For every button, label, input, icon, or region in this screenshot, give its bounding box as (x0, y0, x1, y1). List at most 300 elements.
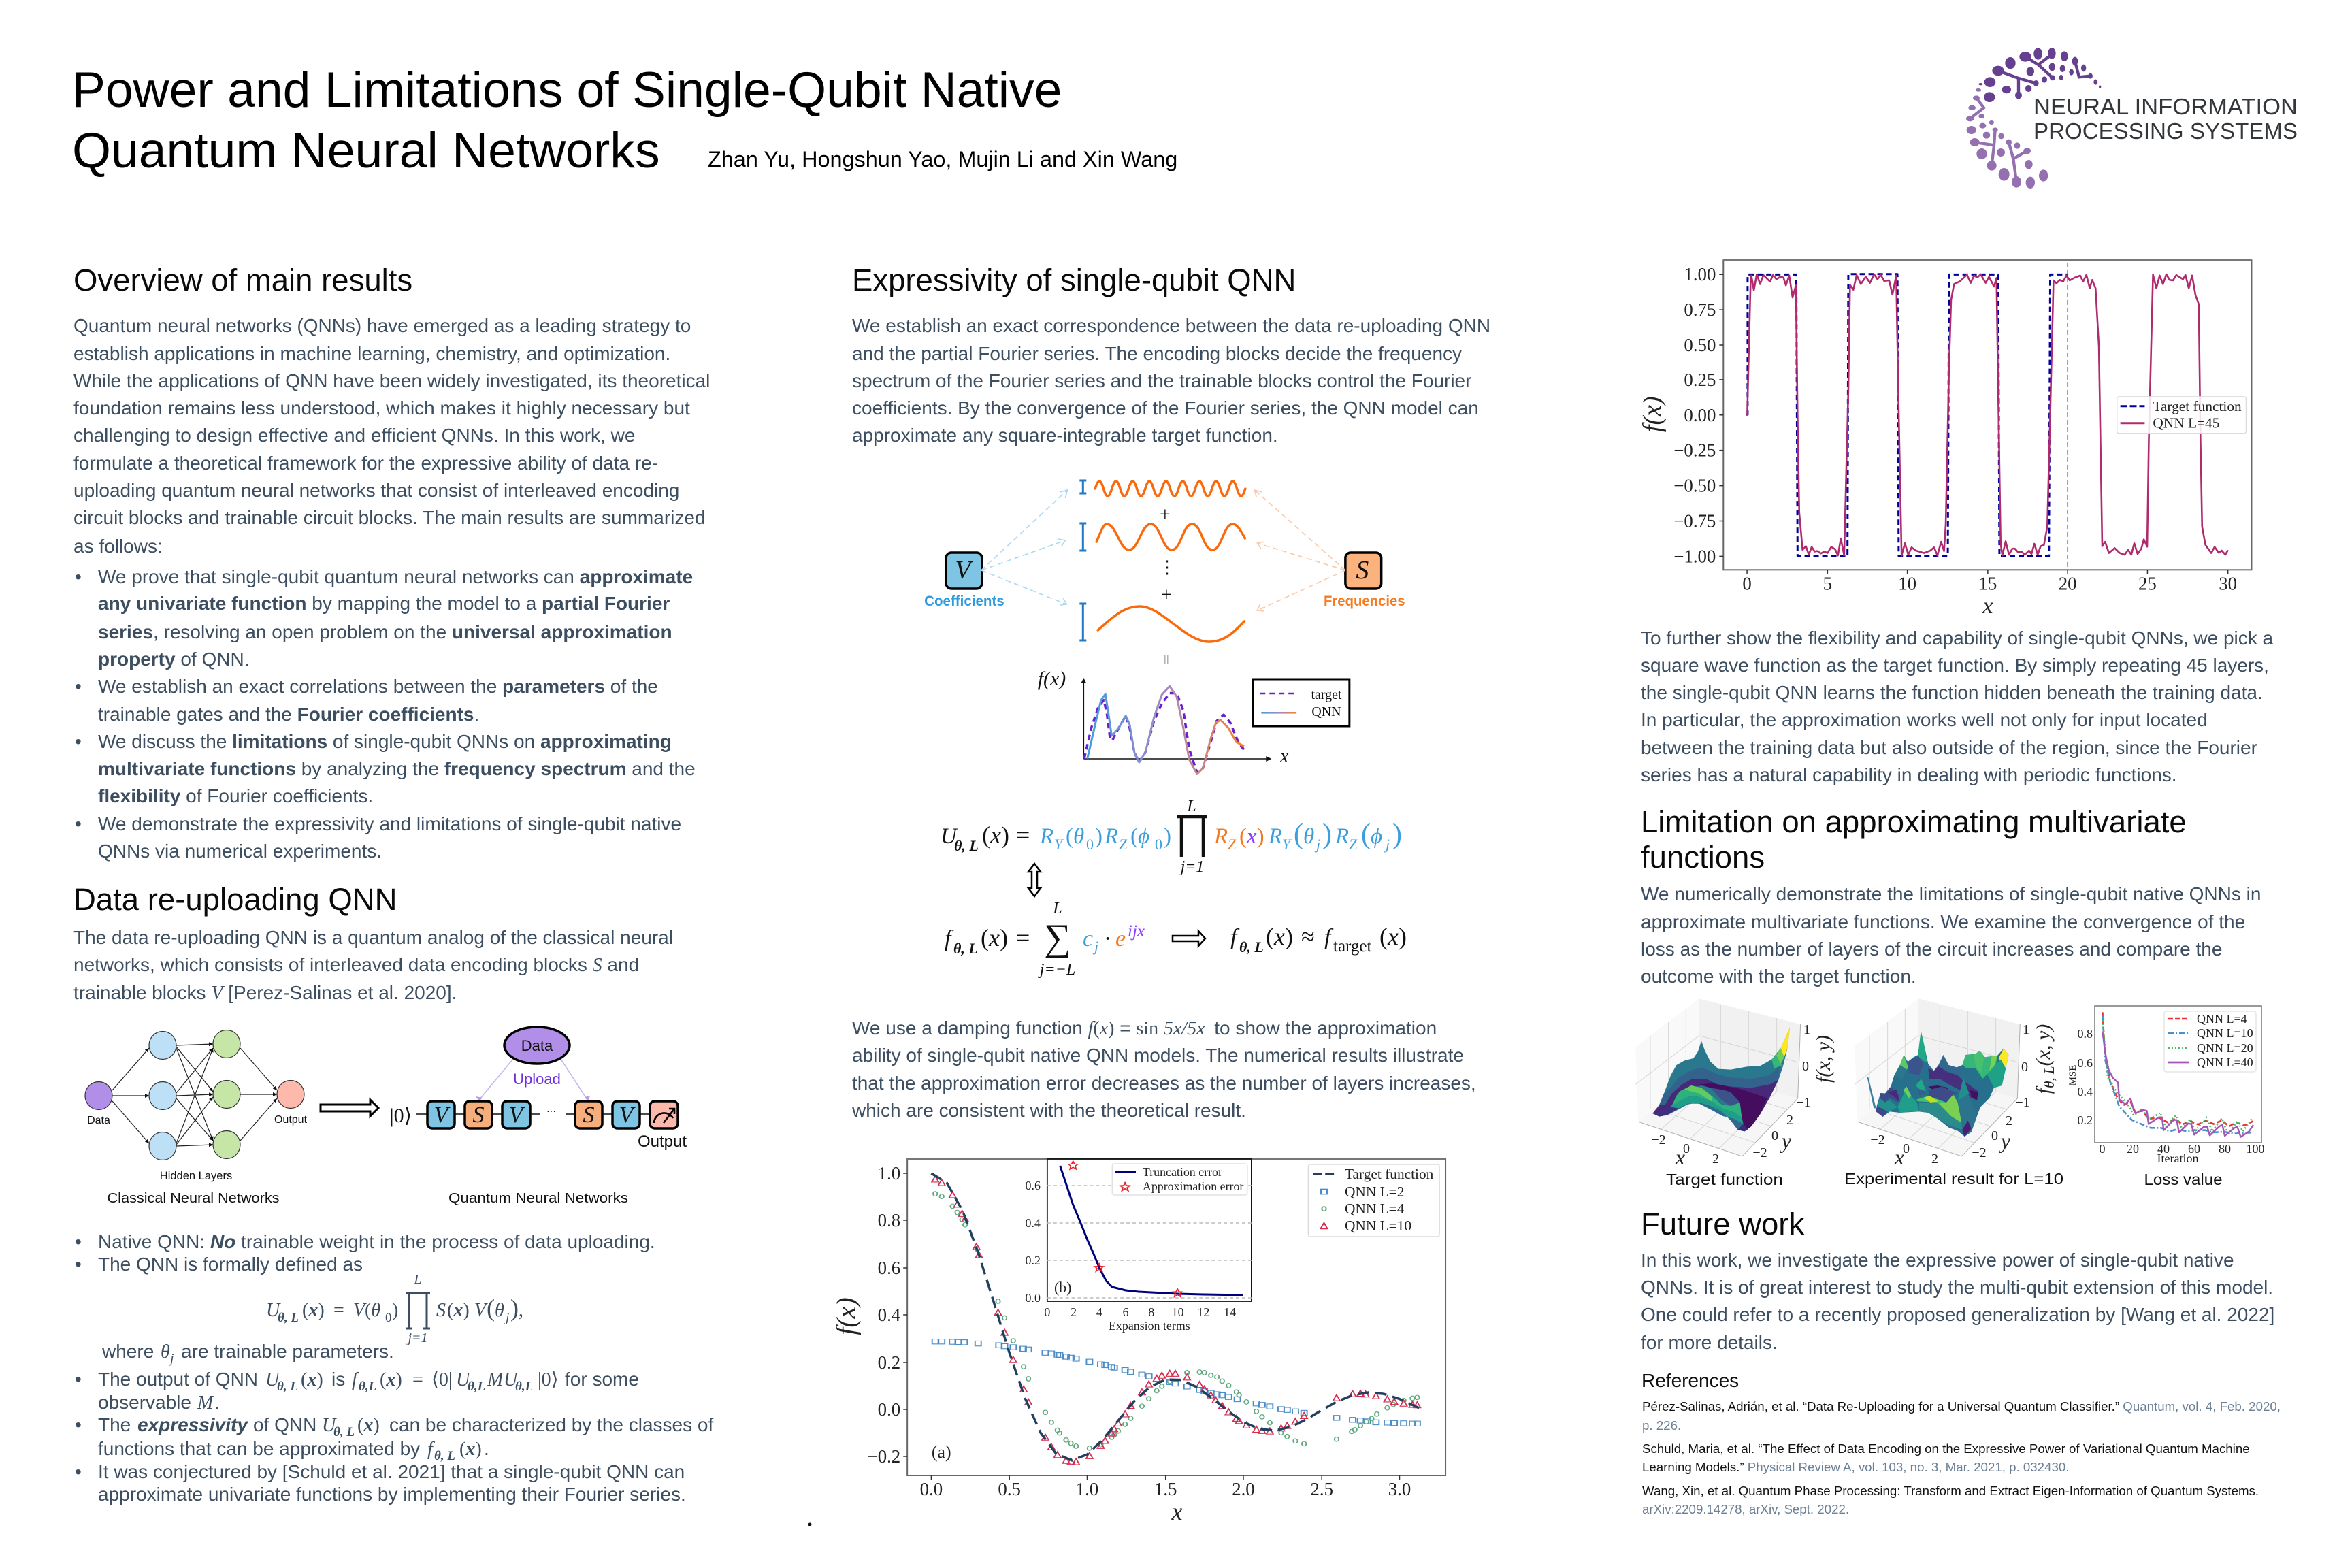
formula: Fourier series: θ, L (1239, 938, 1264, 956)
y-axis tick labels: 0.8 (878, 1210, 900, 1230)
formula: QNN circuit: j (1384, 836, 1390, 853)
text block: future work: In this work, we investigate the expressive power of single-qubit native (1641, 1250, 2234, 1271)
text block: native QNN bullets: is (331, 1369, 345, 1390)
chart: 3D experimental result surface: −2 (1972, 1145, 1987, 1160)
x-axis tick labels: 3.0 (1388, 1479, 1411, 1499)
diagram: Fourier decomposition: + (1160, 504, 1171, 525)
diagram: quantum neural network (390, 1027, 687, 1206)
formula: QNN definition: (θ (487, 1294, 504, 1322)
inset chart: truncation error: 0.4 (1026, 1216, 1041, 1230)
legend: loss: QNN L=10 (2197, 1026, 2253, 1040)
y-axis tick labels: 0.2 (878, 1352, 900, 1373)
x-axis tick labels (1742, 573, 2237, 593)
formula: Fourier series: f (945, 926, 954, 951)
logo: NeurIPS: PROCESSING SYSTEMS (2034, 118, 2298, 144)
text block: overview bullets: We discuss the limitations of single-qubit QNNs on approximating (98, 731, 672, 752)
diagram: quantum neural network: |0⟩ (390, 1105, 412, 1127)
diagram: Fourier decomposition (924, 480, 1405, 774)
heading: future work: Future work (1641, 1207, 1804, 1241)
x-axis tick labels: 10 (1898, 573, 1916, 593)
icon: coefficients V box: V (955, 556, 973, 585)
y-axis tick labels: −0.25 (1673, 440, 1716, 461)
legend: inset: Truncation error (1143, 1165, 1222, 1179)
text block: native QNN bullets: can be characterized by the classes of (389, 1414, 713, 1435)
icon: coefficients V box: Coefficients (924, 593, 1004, 609)
waves: Fourier components (1095, 481, 1245, 642)
chart: loss value: 0.2 (2077, 1113, 2093, 1127)
chart: 3D target function surface: 1 (1803, 1022, 1810, 1037)
text block: native QNN bullets: functions that can be approximated by (98, 1438, 420, 1459)
chart: 3D experimental result surface: 0 (2021, 1060, 2028, 1075)
chart: loss value: 0.8 (2077, 1027, 2093, 1041)
formula: QNN circuit: j=1 (1179, 858, 1204, 876)
text block: damping function: that the approximation error decreases as the number of layers increases, (852, 1073, 1476, 1094)
authors: Zhan Yu, Hongshun Yao, Mujin Li and Xin Wang (708, 147, 1177, 172)
reference: Perez-Salinas: Pérez-Salinas, Adrián, et al. “Data Re-Uploading for a Universal Quantum Classifier.” Quantum, vol. 4, Feb. 2020, (1642, 1399, 2281, 1414)
chart: 3D target function surface: y (1780, 1128, 1792, 1153)
text block: native QNN bullets: . (484, 1438, 489, 1459)
chart: 3D experimental result surface: 0 (1991, 1128, 1998, 1143)
formula: QNN definition: S (436, 1300, 446, 1321)
icon: frequencies S box: S (1356, 556, 1369, 585)
formula: Fourier series: ∑ (1044, 917, 1071, 959)
text block: future work: One could refer to a recently proposed generalization by [Wang et al. 2022] (1641, 1304, 2274, 1325)
formula: QNN circuit: (ϕ (1361, 819, 1382, 850)
text block: overview bullets: series, resolving an open problem on the universal approximation (98, 621, 672, 642)
x-axis tick labels: 0.5 (998, 1479, 1021, 1499)
text block: native QNN bullets: M (197, 1392, 214, 1414)
text block: square wave description: In particular, the approximation works well not only for input located (1641, 709, 2208, 730)
text block: overview bullets: property of QNN. (98, 649, 249, 670)
chart: 3D experimental result surface: 2 (1931, 1152, 1938, 1166)
text block: expressivity intro (852, 315, 1490, 446)
text block: overview paragraph (74, 315, 710, 557)
legend: main chart: QNN L=10 (1345, 1218, 1411, 1234)
inset chart: truncation error: (b) (1054, 1279, 1071, 1296)
text block: native QNN bullets: for some (565, 1369, 639, 1390)
text block: damping function: which are consistent with the theoretical result. (851, 1100, 1246, 1121)
brackets: amplitudes (1079, 480, 1086, 640)
panel: data re-uploading QNN (74, 882, 713, 1505)
x-axis tick labels (920, 1479, 1411, 1499)
text block: overview bullets: QNNs via numerical experiments. (98, 840, 382, 862)
text block: native QNN bullets (75, 1231, 713, 1505)
heading: limitation: functions (1641, 840, 1765, 875)
chart: square wave (1638, 260, 2251, 619)
arrow: equivalence (1028, 864, 1041, 896)
chart: 3D experimental result surface: θ, L (2041, 1066, 2057, 1088)
decorative dot (808, 1523, 811, 1526)
text block: native QNN bullets: j (168, 1351, 174, 1366)
legend: loss: QNN L=20 (2197, 1041, 2253, 1055)
y-axis tick labels: −0.50 (1673, 475, 1716, 496)
text block: overview bullets: We demonstrate the expressivity and limitations of single-qubit native (98, 813, 681, 834)
chart: loss value: 40 (2157, 1142, 2170, 1156)
inset chart: truncation error: 6 (1123, 1305, 1129, 1319)
text block: overview bullets: • (75, 731, 82, 752)
text block: native QNN bullets: U (322, 1415, 337, 1436)
formula: QNN circuit: ) (1392, 819, 1402, 850)
reference: Perez-Salinas: p. 226. (1642, 1418, 1681, 1433)
text block: native QNN bullets: f (427, 1439, 435, 1460)
diagram: quantum neural network: V (509, 1102, 526, 1128)
diagram: quantum neural network: V (434, 1102, 451, 1128)
formula: QNN definition: ), (510, 1294, 523, 1322)
chart: loss value (2068, 1006, 2265, 1188)
diagram: quantum neural network: Upload (513, 1071, 561, 1088)
text block: limitation description: loss as the number of layers of the circuit increases and compare the (1641, 938, 2222, 960)
text block: overview paragraph: challenging to design effective and efficient QNNs. In this work, we (74, 425, 635, 446)
text block: native QNN bullets: expressivity (137, 1414, 248, 1435)
formula: QNN circuit: U (941, 824, 958, 849)
diagram: quantum neural network: Quantum Neural Networks (448, 1191, 628, 1206)
text block: expressivity intro: coefficients. By the convergence of the Fourier series, the QNN model can (852, 397, 1479, 419)
legend: inset: Approximation error (1143, 1179, 1243, 1193)
formula: Fourier series: j=−L (1038, 961, 1075, 979)
x-axis tick labels: 5 (1823, 573, 1832, 593)
formula: QNN definition: 0 (385, 1311, 392, 1325)
chart: loss value: MSE (2068, 1065, 2078, 1085)
inset chart: truncation error (1026, 1159, 1252, 1333)
formula: QNN definition (266, 1272, 523, 1345)
text block: damping function: We use a damping function f(x) = sin 5x/5x to show the approximation (852, 1017, 1437, 1039)
y-axis tick labels (1673, 264, 1716, 566)
text block: overview bullets (75, 566, 696, 862)
formula: QNN circuit: θ, L (954, 837, 979, 854)
chart: f(x) target vs QNN: x (1279, 746, 1289, 767)
chart: 3D target function surface: x (1675, 1145, 1685, 1169)
formula: QNN circuit: Y (1054, 836, 1064, 853)
chart: 3D experimental result surface: 2 (2006, 1113, 2012, 1128)
text block: limitation description (1641, 883, 2261, 987)
text block: overview paragraph: circuit blocks and trainable circuit blocks. The main results are summarized (74, 507, 706, 528)
text block: native QNN bullets: |0⟩ (538, 1369, 559, 1390)
diagram: Fourier decomposition: + (1161, 585, 1172, 606)
formula: Fourier series: θ, L (953, 940, 978, 957)
text block: future work: QNNs. It is of great interest to study the multi-qubit extension of this model. (1641, 1277, 2273, 1298)
chart: loss value: Iteration (2157, 1152, 2198, 1165)
chart: 3D experimental result surface: 1 (2023, 1022, 2029, 1037)
text block: native QNN bullets: Native QNN: No trainable weight in the process of data uploading. (98, 1231, 655, 1252)
chart: loss value: 0.6 (2077, 1056, 2093, 1070)
text block: native QNN bullets: θ, L (333, 1425, 355, 1439)
formula: QNN circuit: (θ (1066, 824, 1084, 849)
inset chart: truncation error: 0.6 (1026, 1179, 1041, 1192)
reference: Wang (1642, 1484, 2259, 1516)
formula: QNN circuit: Y (1282, 836, 1292, 853)
chart: target function vs QNN with inset: f(x) (831, 1297, 862, 1335)
text block: native QNN bullets: It was conjectured by [Schuld et al. 2021] that a single-qubit QNN can (98, 1461, 685, 1482)
chart: square wave: x (1982, 593, 1993, 619)
text block: native QNN bullets: (x) (380, 1369, 402, 1390)
text block: native QNN bullets: (x) (301, 1369, 323, 1390)
text block: overview bullets: • (75, 813, 82, 834)
text block: data re-uploading intro (74, 927, 673, 1004)
text block: limitation description: We numerically demonstrate the limitations of single-qubit native QNNs in (1641, 883, 2261, 904)
text block: overview bullets: trainable gates and the Fourier coefficients. (98, 704, 479, 725)
chart: 3D target function surface: −2 (1752, 1145, 1767, 1160)
text block: native QNN bullets: U (456, 1369, 471, 1390)
formula: Fourier series: f (1230, 925, 1240, 950)
formula: QNN circuit: = (1016, 821, 1030, 849)
diagram: quantum neural network: S (583, 1102, 595, 1128)
x-axis tick labels: 30 (2219, 573, 2237, 593)
formula: QNN circuit: Z (1119, 836, 1128, 853)
reference: Schuld: Learning Models.” Physical Review A, vol. 103, no. 3, Mar. 2021, p. 032430. (1642, 1460, 2069, 1474)
text block: native QNN bullets: The QNN is formally defined as (98, 1254, 363, 1275)
text block: native QNN bullets: θ (161, 1341, 170, 1362)
x-axis tick labels: 0 (1742, 573, 1752, 593)
formula: QNN definition: j (504, 1311, 509, 1325)
text block: overview bullets: We prove that single-qubit quantum neural networks can approximate (98, 566, 693, 587)
y-axis tick labels: 0.4 (878, 1305, 901, 1325)
series: target and QNN L=45 (1747, 263, 2228, 570)
formula: QNN circuit: R (1104, 824, 1118, 849)
chart: loss value: 100 (2246, 1142, 2265, 1156)
formula: QNN circuit: L (1186, 798, 1196, 815)
formula: Fourier series: f (1324, 925, 1334, 950)
chart: 3D target function surface: 0 (1683, 1141, 1690, 1156)
chart: loss value: 60 (2188, 1142, 2200, 1156)
inset chart: truncation error: 12 (1197, 1305, 1209, 1319)
formula: QNN definition: (θ (365, 1300, 380, 1321)
text block: overview bullets: • (75, 676, 82, 697)
formula: QNN definition: ) (392, 1300, 398, 1321)
text block: future work (1641, 1250, 2274, 1353)
text block: limitation description: outcome with the target function. (1641, 966, 1916, 987)
text block: damping function (851, 1017, 1476, 1121)
text block: native QNN bullets: θ,L (515, 1379, 533, 1394)
text block: damping function: ability of single-qubit native QNN models. The numerical results illustrate (852, 1045, 1464, 1066)
formula: QNN circuit: ) (1322, 819, 1332, 850)
formula: QNN circuit: R (1213, 824, 1228, 849)
text block: expressivity intro: and the partial Fourier series. The encoding blocks decide the frequency (852, 343, 1462, 364)
reference: Schuld: Schuld, Maria, et al. “The Effect of Data Encoding on the Expressive Power of Variational Quantum Machine (1642, 1441, 2250, 1456)
arrows: coefficients to waves (981, 490, 1067, 605)
chart: 3D experimental result surface: 0 (1903, 1141, 1910, 1156)
logo: NeurIPS: NEURAL INFORMATION (2034, 94, 2298, 119)
chart: f(x) target vs QNN: f(x) (1038, 668, 1066, 690)
text block: square wave description: between the training data but also outside of the region, since the Fourier (1641, 737, 2257, 758)
text block: native QNN bullets: M (487, 1369, 504, 1390)
x-axis tick labels: 15 (1978, 573, 1997, 593)
reference: Schuld (1642, 1441, 2250, 1474)
text block: native QNN bullets: observable (98, 1392, 191, 1413)
chart: f(x) target vs QNN: QNN (1311, 704, 1341, 719)
formula: QNN circuit: j (1314, 836, 1320, 853)
text block: native QNN bullets: • (75, 1414, 82, 1435)
chart: 3D experimental result surface: −2 (1870, 1132, 1885, 1147)
legend: main chart: QNN L=2 (1345, 1183, 1404, 1200)
text block: overview bullets: • (75, 566, 82, 587)
y-axis tick labels: 1.0 (878, 1163, 900, 1183)
text block: native QNN bullets: . (214, 1392, 220, 1413)
chart: loss value: 20 (2127, 1142, 2139, 1156)
formula: Fourier series: (x) (981, 924, 1008, 951)
formula: QNN circuit: 0 (1155, 836, 1162, 853)
inset chart: truncation error: 2 (1071, 1305, 1077, 1319)
chart: f(x) target vs QNN: target (1311, 687, 1342, 702)
formula: QNN definition: V (474, 1300, 488, 1321)
heading: data re-uploading: Data re-uploading QNN (74, 882, 397, 917)
text block: native QNN bullets: = (412, 1369, 423, 1390)
y-axis tick labels: 0.0 (878, 1399, 900, 1420)
diagram: classical neural network: Hidden Layers (160, 1170, 232, 1182)
diagram: Fourier decomposition: ⋮ (1158, 557, 1176, 577)
formula: Fourier series: ≈ (1301, 923, 1315, 950)
text block: native QNN bullets: U (265, 1369, 280, 1390)
inset chart: truncation error: 14 (1224, 1305, 1236, 1319)
text block: expressivity intro: approximate any square-integrable target function. (852, 425, 1278, 446)
formula: Fourier series (945, 900, 1407, 979)
text block: native QNN bullets: θ, L (434, 1449, 455, 1463)
text block: native QNN bullets: ⟨0| (431, 1369, 453, 1390)
diagram: quantum neural network: V (619, 1102, 636, 1128)
inset chart: truncation error: 8 (1148, 1305, 1154, 1319)
text block: native QNN bullets: • (75, 1231, 82, 1252)
text block: overview paragraph: formulate a theoretical framework for the expressive ability of data re- (74, 453, 658, 474)
formula: Fourier series: c (1083, 926, 1093, 951)
caption: target function: Target function (1666, 1171, 1783, 1188)
chart: 3D target function surface: 0 (1802, 1059, 1809, 1074)
chart: 3D experimental result surface: y (1999, 1128, 2011, 1153)
chart: loss value: 0 (2099, 1142, 2106, 1156)
chart: loss value: 80 (2219, 1142, 2231, 1156)
formula: QNN circuit: (ϕ (1130, 824, 1149, 849)
text block: future work: for more details. (1641, 1332, 1778, 1353)
chart: 3D target function surface: 2 (1786, 1113, 1793, 1128)
chart: 3D target function surface (1635, 998, 1835, 1188)
heading: references: References (1642, 1370, 1739, 1391)
chart: target function vs QNN with inset: (a) (932, 1442, 951, 1462)
logo: NeurIPS (1966, 48, 2298, 189)
text block: native QNN bullets: The (98, 1414, 131, 1435)
formula: QNN definition: U (266, 1300, 281, 1321)
formula: Fourier series: ijx (1128, 922, 1145, 941)
caption: experimental result: Experimental result for L=10 (1844, 1170, 2063, 1188)
y-axis tick labels: 0.6 (878, 1258, 900, 1278)
heading: overview: Overview of main results (74, 263, 412, 297)
formula: Fourier series: L (1052, 900, 1062, 917)
inset chart: truncation error: Expansion terms (1109, 1319, 1190, 1333)
diagram: quantum neural network: Data (521, 1037, 553, 1054)
formula: Fourier series: (x) (1266, 923, 1293, 950)
inset chart: truncation error: 0.2 (1026, 1254, 1041, 1267)
formula: QNN circuit: Z (1228, 836, 1237, 853)
y-axis tick labels: −0.2 (868, 1446, 900, 1467)
chart: 3D target function surface: 0 (1771, 1128, 1778, 1143)
panel: expressivity of single-qubit QNN (831, 263, 1490, 1525)
text block: native QNN bullets: (x) (459, 1439, 482, 1460)
text block: overview paragraph: Quantum neural networks (QNNs) have emerged as a leading strategy to (74, 315, 691, 336)
x-axis tick labels: 1.5 (1154, 1479, 1177, 1499)
formula: QNN definition: (x) (302, 1300, 325, 1321)
text block: native QNN bullets: f (352, 1369, 359, 1390)
text block: overview bullets: We establish an exact correlations between the parameters of the (98, 676, 658, 697)
formula: QNN definition: (x) (447, 1300, 470, 1321)
diagram: quantum neural network: S (472, 1102, 485, 1128)
text block: overview paragraph: foundation remains less understood, which makes it highly necessary but (74, 397, 690, 419)
text block: data re-uploading intro: trainable blocks V [Perez-Salinas et al. 2020]. (74, 982, 457, 1004)
text block: overview paragraph: While the applications of QNN have been widely investigated, its theoretical (74, 370, 710, 391)
y-axis tick labels: 0.00 (1684, 405, 1716, 425)
diagram: quantum neural network: Output (638, 1132, 687, 1151)
text block: square wave description: square wave function as the target function. By simply repeating 45 layers, (1641, 655, 2269, 676)
text block: native QNN bullets: where (102, 1341, 154, 1362)
formula: Fourier series: j (1092, 938, 1098, 955)
formula: QNN circuit: Z (1349, 836, 1358, 853)
chart: 3D experimental result surface: (x, y) (2032, 1024, 2055, 1066)
text block: overview bullets: multivariate functions by analyzing the frequency spectrum and the (98, 758, 696, 779)
text block: data re-uploading intro: networks, which consists of interleaved data encoding blocks S and (74, 954, 639, 976)
text block: native QNN bullets: • (75, 1461, 82, 1482)
inset chart: truncation error: 4 (1096, 1305, 1102, 1319)
icon: frequencies S box: Frequencies (1324, 593, 1405, 609)
text block: native QNN bullets: (x) (357, 1415, 380, 1436)
icon: coefficients V box (924, 553, 1004, 609)
text block: overview paragraph: as follows: (74, 536, 163, 557)
text block: square wave description: series has a natural capability in dealing with periodic functions. (1641, 764, 2177, 785)
text block: native QNN bullets: • (75, 1254, 82, 1275)
icon: frequencies S box (1324, 553, 1405, 609)
formula: Fourier series: · (1104, 926, 1111, 951)
formula: Fourier series: e (1115, 926, 1126, 951)
formula: QNN definition: j=1 (406, 1330, 428, 1345)
text block: overview bullets: flexibility of Fourier coefficients. (98, 785, 373, 806)
x-axis tick labels: 25 (2138, 573, 2157, 593)
formula: QNN circuit: ) (1095, 824, 1102, 849)
x-axis tick labels: 1.0 (1076, 1479, 1098, 1499)
y-axis tick labels: 0.25 (1684, 370, 1716, 390)
y-axis tick labels: 0.75 (1684, 299, 1716, 320)
y-axis tick labels: 0.50 (1684, 335, 1716, 355)
text block: native QNN bullets: of QNN (253, 1414, 316, 1435)
text block: square wave description (1641, 627, 2274, 785)
chart: 3D target function surface: −1 (1796, 1095, 1811, 1110)
caption: loss value: Loss value (2144, 1171, 2223, 1188)
formula: QNN definition: V (353, 1300, 367, 1321)
arrow: implies (1173, 931, 1205, 946)
formula: QNN circuit: R (1039, 824, 1054, 849)
text block: data re-uploading intro: The data re-uploading QNN is a quantum analog of the classical neural (74, 927, 673, 948)
inset chart: truncation error: 10 (1172, 1305, 1184, 1319)
legend: loss (2164, 1011, 2256, 1072)
y-axis tick labels (868, 1163, 901, 1467)
legend: main chart (1308, 1164, 1439, 1237)
formula: Fourier series: (x) (1379, 923, 1407, 950)
inset chart: truncation error: 0 (1044, 1305, 1050, 1319)
heading: limitation (1641, 804, 2187, 875)
legend: loss: QNN L=4 (2197, 1012, 2247, 1026)
heading: expressivity: Expressivity of single-qubit QNN (852, 263, 1296, 297)
diagram: classical neural network (85, 1030, 308, 1206)
text block: native QNN bullets: θ,L (359, 1379, 376, 1394)
reference: Wang: Wang, Xin, et al. Quantum Phase Processing: Transform and Extract Eigen-Information of Quantum Systems. (1642, 1484, 2259, 1498)
chart: target function vs QNN with inset: x (1171, 1498, 1183, 1525)
diagram: classical neural network: Classical Neural Networks (108, 1191, 279, 1206)
legend: square wave: Target function (2153, 398, 2242, 414)
y-axis tick labels: 1.00 (1684, 264, 1716, 284)
text block: overview paragraph: establish applications in machine learning, chemistry, and optimization. (74, 343, 670, 364)
formula: QNN circuit (941, 798, 1402, 876)
y-axis tick labels: −1.00 (1673, 546, 1716, 566)
formula: QNN circuit: R (1268, 824, 1282, 849)
title: Quantum Neural Networks (72, 122, 660, 178)
text block: native QNN bullets: The output of QNN (98, 1369, 258, 1390)
diagram: classical neural network: Output (274, 1114, 308, 1126)
diagram: quantum neural network: ··· (546, 1105, 556, 1116)
formula: QNN circuit: ) (1164, 824, 1171, 849)
